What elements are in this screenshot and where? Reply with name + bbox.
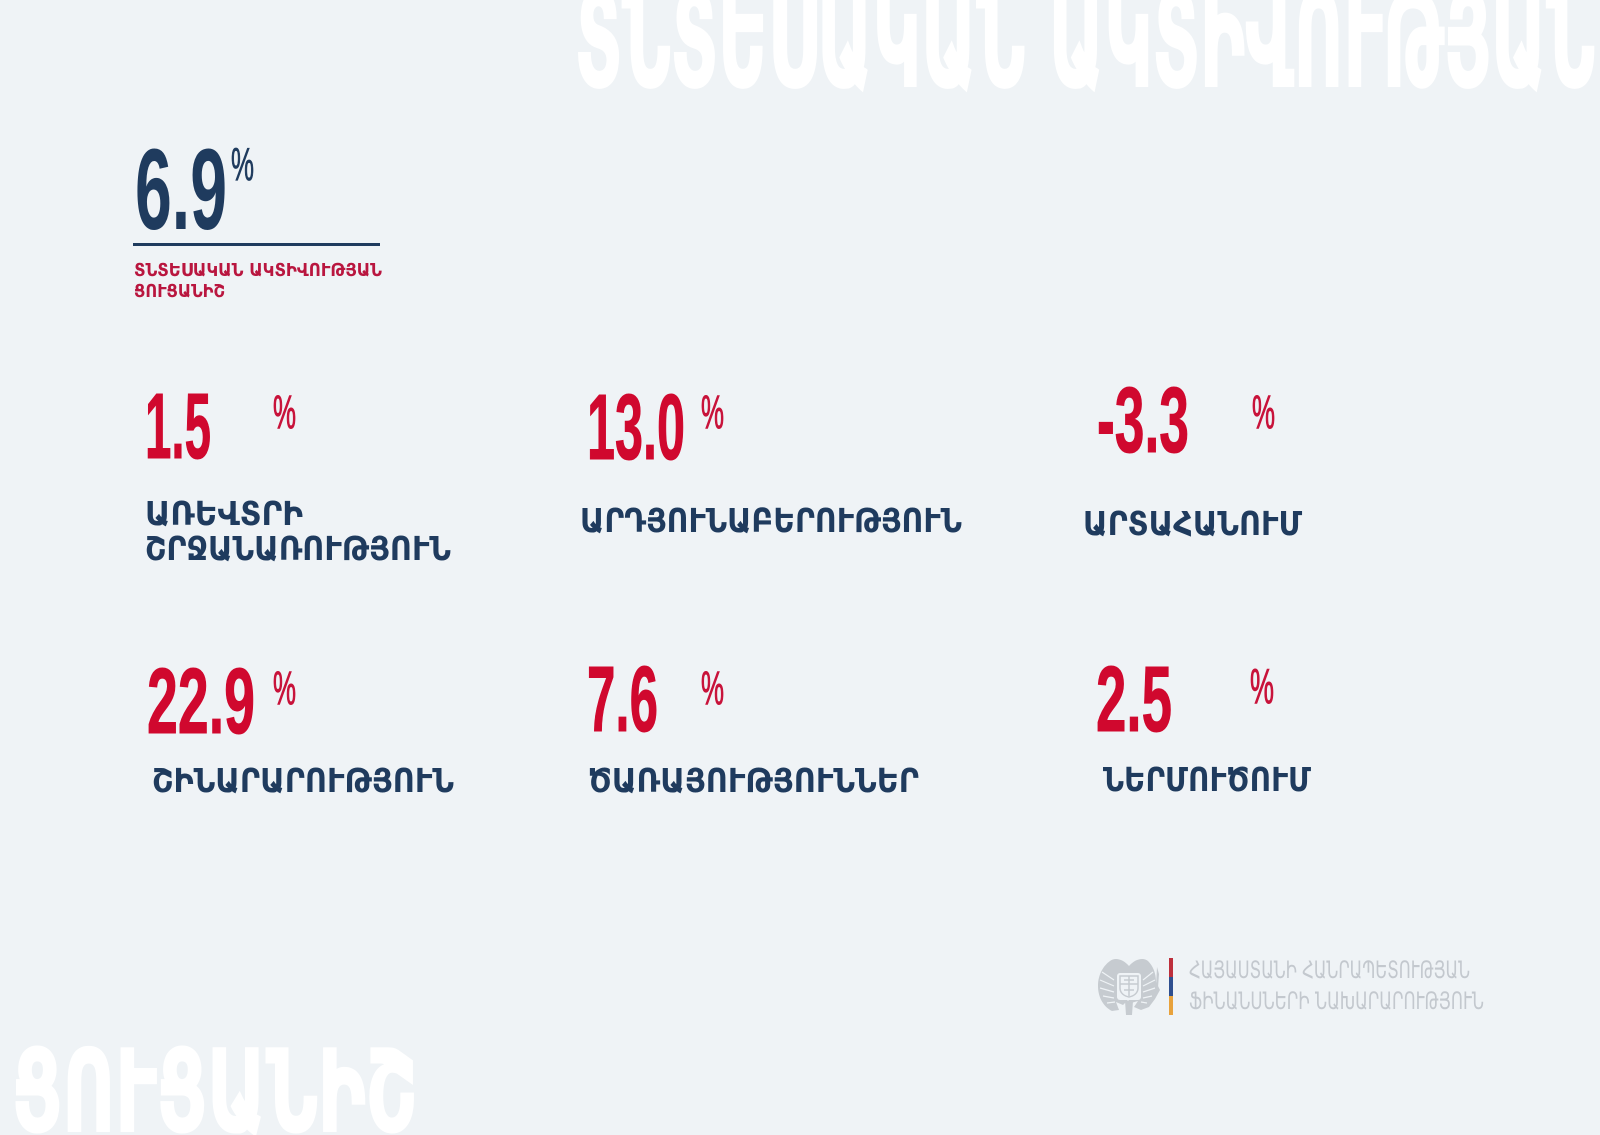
value: 7.6 — [587, 647, 658, 751]
panel: industry — [580, 375, 962, 540]
headline caption: ՑՈՒՑԱՆԻՇ — [134, 282, 225, 302]
value: 2.5 — [1096, 647, 1172, 751]
label: ՇԻՆԱՐԱՐՈՒԹՅՈՒՆ — [152, 761, 454, 800]
panel: imports — [1096, 647, 1311, 799]
label: ՆԵՐՄՈՒԾՈՒՄ — [1103, 760, 1311, 799]
percent sign: % — [1252, 385, 1275, 438]
headline caption: ՏՆՏԵՍԱԿԱՆ ԱԿՏԻՎՈՒԹՅԱՆ — [134, 261, 382, 281]
footer: ministry logo — [1098, 956, 1484, 1015]
headline value: 6.9 — [135, 126, 227, 254]
label: ԱՌԵՎՏՐԻ — [145, 494, 303, 533]
panel: services — [587, 647, 919, 800]
headline rule — [133, 243, 380, 246]
headline percent sign: % — [231, 138, 254, 190]
ministry name: ՀԱՅԱՍՏԱՆԻ ՀԱՆՐԱՊԵՏՈՒԹՅԱՆ — [1189, 956, 1470, 984]
percent sign: % — [273, 661, 296, 714]
panel: agriculture — [1083, 368, 1302, 543]
value: 22.9 — [147, 649, 255, 753]
label: ԾԱՌԱՅՈՒԹՅՈՒՆՆԵՐ — [588, 761, 919, 800]
percent sign: % — [701, 385, 724, 438]
panel: foreign trade — [145, 374, 451, 568]
icon: coat of arms — [1098, 959, 1160, 1015]
value: -3.3 — [1097, 368, 1189, 472]
label: ԱՐԴՅՈՒՆԱԲԵՐՈՒԹՅՈՒՆ — [580, 501, 962, 540]
value: 1.5 — [145, 374, 211, 478]
label: ԱՐՏԱՀԱՆՈՒՄ — [1083, 504, 1302, 543]
panel: headline indicator — [133, 126, 388, 302]
label: ՇՐՋԱՆԱՌՈՒԹՅՈՒՆ — [145, 529, 451, 568]
percent sign: % — [1250, 660, 1274, 714]
flag stripe — [1169, 958, 1173, 1015]
percent sign: % — [701, 661, 724, 714]
value: 13.0 — [587, 375, 685, 479]
panel: construction — [147, 649, 454, 800]
percent sign: % — [273, 385, 296, 438]
